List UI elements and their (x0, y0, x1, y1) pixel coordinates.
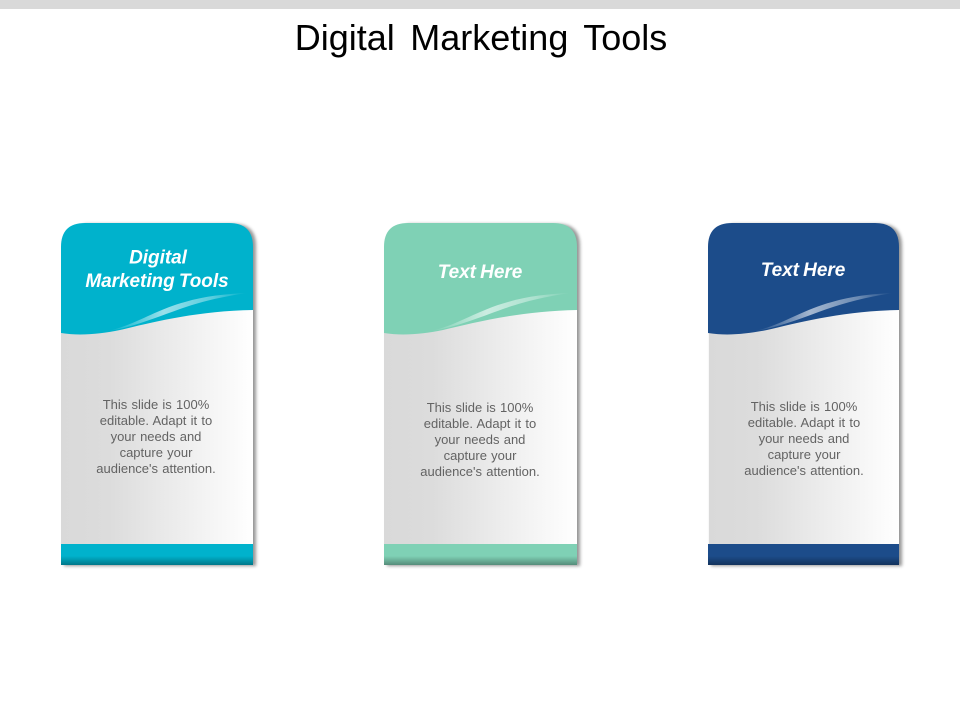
card 1 shadow (64, 224, 256, 566)
title: Digital Marketing Tools (295, 17, 667, 58)
card 3 text: your needs and (759, 431, 849, 446)
card 1 swoosh (108, 293, 247, 331)
card 2 header (384, 223, 577, 334)
card 3 body (709, 300, 899, 545)
card 1 text: This slide is 100% (103, 397, 210, 412)
card 1 text: editable. Adapt it to (100, 413, 212, 428)
card 3 swoosh (755, 293, 893, 331)
card 1 text: capture your (120, 445, 193, 460)
card 1 body (61, 300, 253, 545)
card 1 text: your needs and (111, 429, 201, 444)
card 3 text: This slide is 100% (751, 399, 858, 414)
card 3 text: editable. Adapt it to (748, 415, 860, 430)
card 3 footer (708, 544, 899, 565)
top bar (0, 0, 960, 9)
card 2 shadow (387, 224, 580, 566)
card 1 heading: Marketing Tools (85, 271, 229, 292)
card 3 heading: Text Here (761, 260, 846, 281)
card 1 footer (61, 544, 253, 565)
card 3 text: audience's attention. (744, 463, 864, 478)
card 2 text: This slide is 100% (427, 400, 534, 415)
panel: card 2 (384, 223, 580, 566)
card 2 text: your needs and (435, 432, 525, 447)
card 1 header (61, 223, 253, 334)
card 2 body (384, 300, 577, 545)
panel: card 1 (61, 223, 256, 566)
card 2 text: editable. Adapt it to (424, 416, 536, 431)
card 1 heading: Digital (129, 248, 188, 268)
card 2 text: audience's attention. (420, 464, 540, 479)
card 3 header (708, 223, 899, 334)
card 2 text: capture your (444, 448, 517, 463)
card 2 footer (384, 544, 577, 565)
card 3 text: capture your (768, 447, 841, 462)
card 2 swoosh (431, 293, 570, 331)
card 3 shadow (711, 224, 902, 566)
panel: card 3 (708, 223, 902, 566)
card 1 text: audience's attention. (96, 461, 216, 476)
card 2 heading: Text Here (438, 262, 523, 283)
